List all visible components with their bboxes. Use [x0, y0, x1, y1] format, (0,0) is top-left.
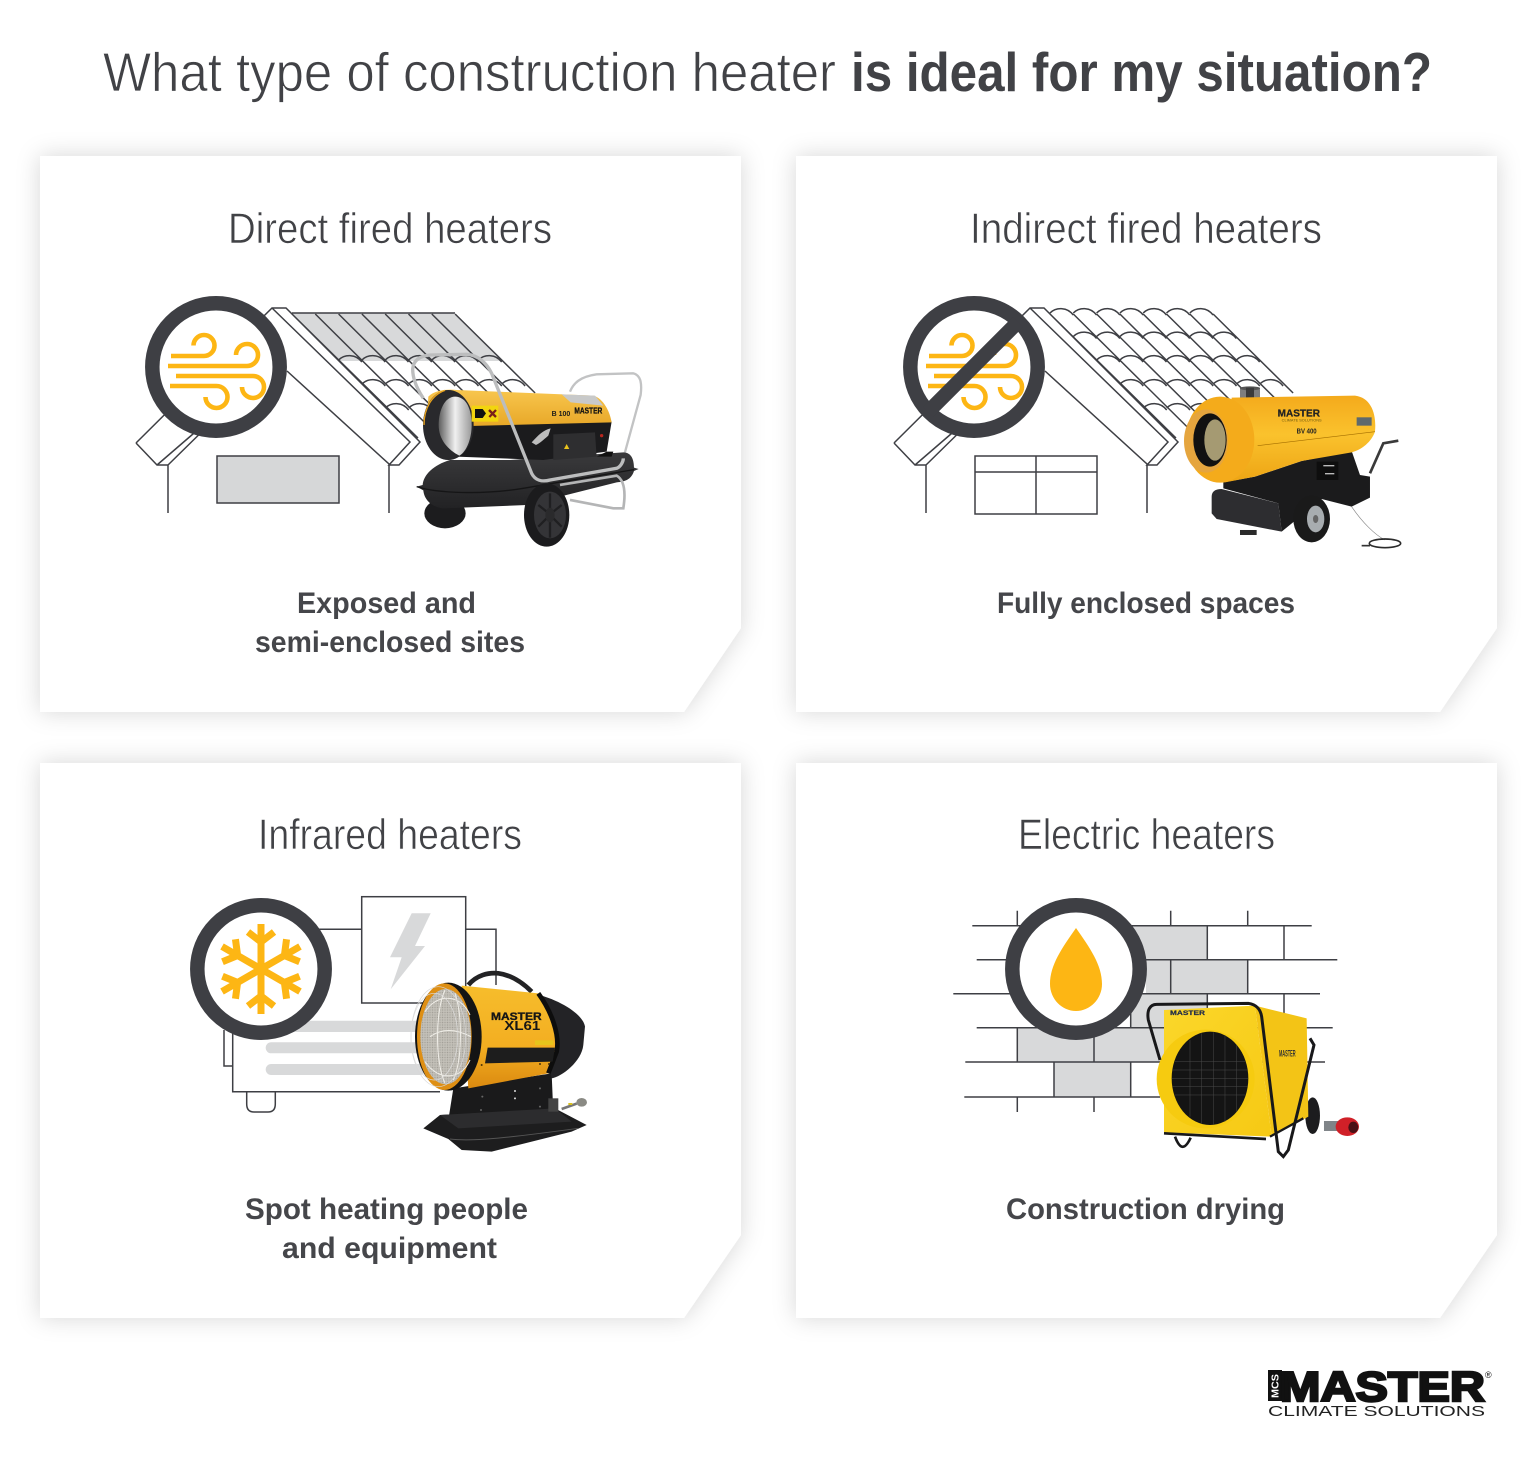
caption: exposed and semi-enclosed sites — [255, 587, 525, 659]
logo: Master Climate Solutions: MASTER — [1280, 1363, 1485, 1410]
heading: electric heaters: Electric heaters — [1018, 811, 1275, 859]
heater: electric: MASTER — [1279, 1049, 1296, 1059]
caption: construction drying: Construction drying — [1006, 1193, 1285, 1226]
icon: wind — [152, 303, 280, 431]
illustration: brick wall — [953, 911, 1337, 1112]
logo: Master Climate Solutions: ® — [1485, 1370, 1492, 1380]
panel: electric heaters — [796, 763, 1497, 1318]
heater: BV 400 indirect fired: BV 400 — [1297, 427, 1317, 436]
panel: indirect fired heaters — [796, 156, 1497, 712]
caption: exposed and semi-enclosed sites: Exposed and — [297, 587, 476, 620]
icon: snowflake — [197, 905, 325, 1033]
caption: exposed and semi-enclosed sites: semi-enclosed sites — [255, 626, 525, 659]
caption: spot heating people and equipment: and equipment — [282, 1232, 497, 1265]
heater: electric — [1148, 1003, 1359, 1157]
title: is ideal for my situation? — [851, 41, 1432, 103]
illustration: machine with power symbol — [224, 897, 496, 1112]
heater: XL61 infrared — [411, 973, 587, 1152]
caption: spot heating people and equipment — [245, 1193, 528, 1265]
caption: fully enclosed spaces: Fully enclosed spaces — [997, 587, 1295, 620]
illustration: building with closed roof — [894, 308, 1306, 514]
heading: indirect fired heaters: Indirect fired heaters — [970, 205, 1322, 253]
panel: direct fired heaters — [40, 156, 741, 712]
icon: water drop — [1012, 905, 1140, 1033]
title — [103, 41, 1432, 103]
title: What type of construction heater — [103, 41, 836, 103]
heater: B 100 direct fired: B 100 — [552, 409, 570, 418]
heater: B 100 direct fired — [413, 354, 641, 547]
heater: BV 400 indirect fired: MASTER — [1278, 409, 1320, 420]
heater: XL61 infrared: XL61 — [504, 1019, 540, 1033]
panel: infrared heaters — [40, 763, 741, 1318]
heater: B 100 direct fired: MASTER — [574, 405, 603, 415]
heater: electric: MASTER — [1170, 1010, 1205, 1017]
heater: BV 400 indirect fired: CLIMATE SOLUTIONS — [1282, 419, 1322, 423]
heater: BV 400 indirect fired — [1184, 386, 1401, 548]
heater: XL61 infrared: MASTER — [491, 1011, 542, 1023]
illustration: building with open roof — [136, 308, 548, 513]
icon: no wind — [910, 303, 1038, 431]
heading: infrared heaters: Infrared heaters — [258, 811, 522, 859]
logo: Master Climate Solutions: MCS — [1270, 1374, 1282, 1398]
heading: direct fired heaters: Direct fired heaters — [228, 205, 552, 253]
logo: Master Climate Solutions: CLIMATE SOLUTIONS — [1268, 1403, 1485, 1420]
logo: Master Climate Solutions — [1268, 1363, 1492, 1420]
caption: spot heating people and equipment: Spot heating people — [245, 1193, 528, 1226]
